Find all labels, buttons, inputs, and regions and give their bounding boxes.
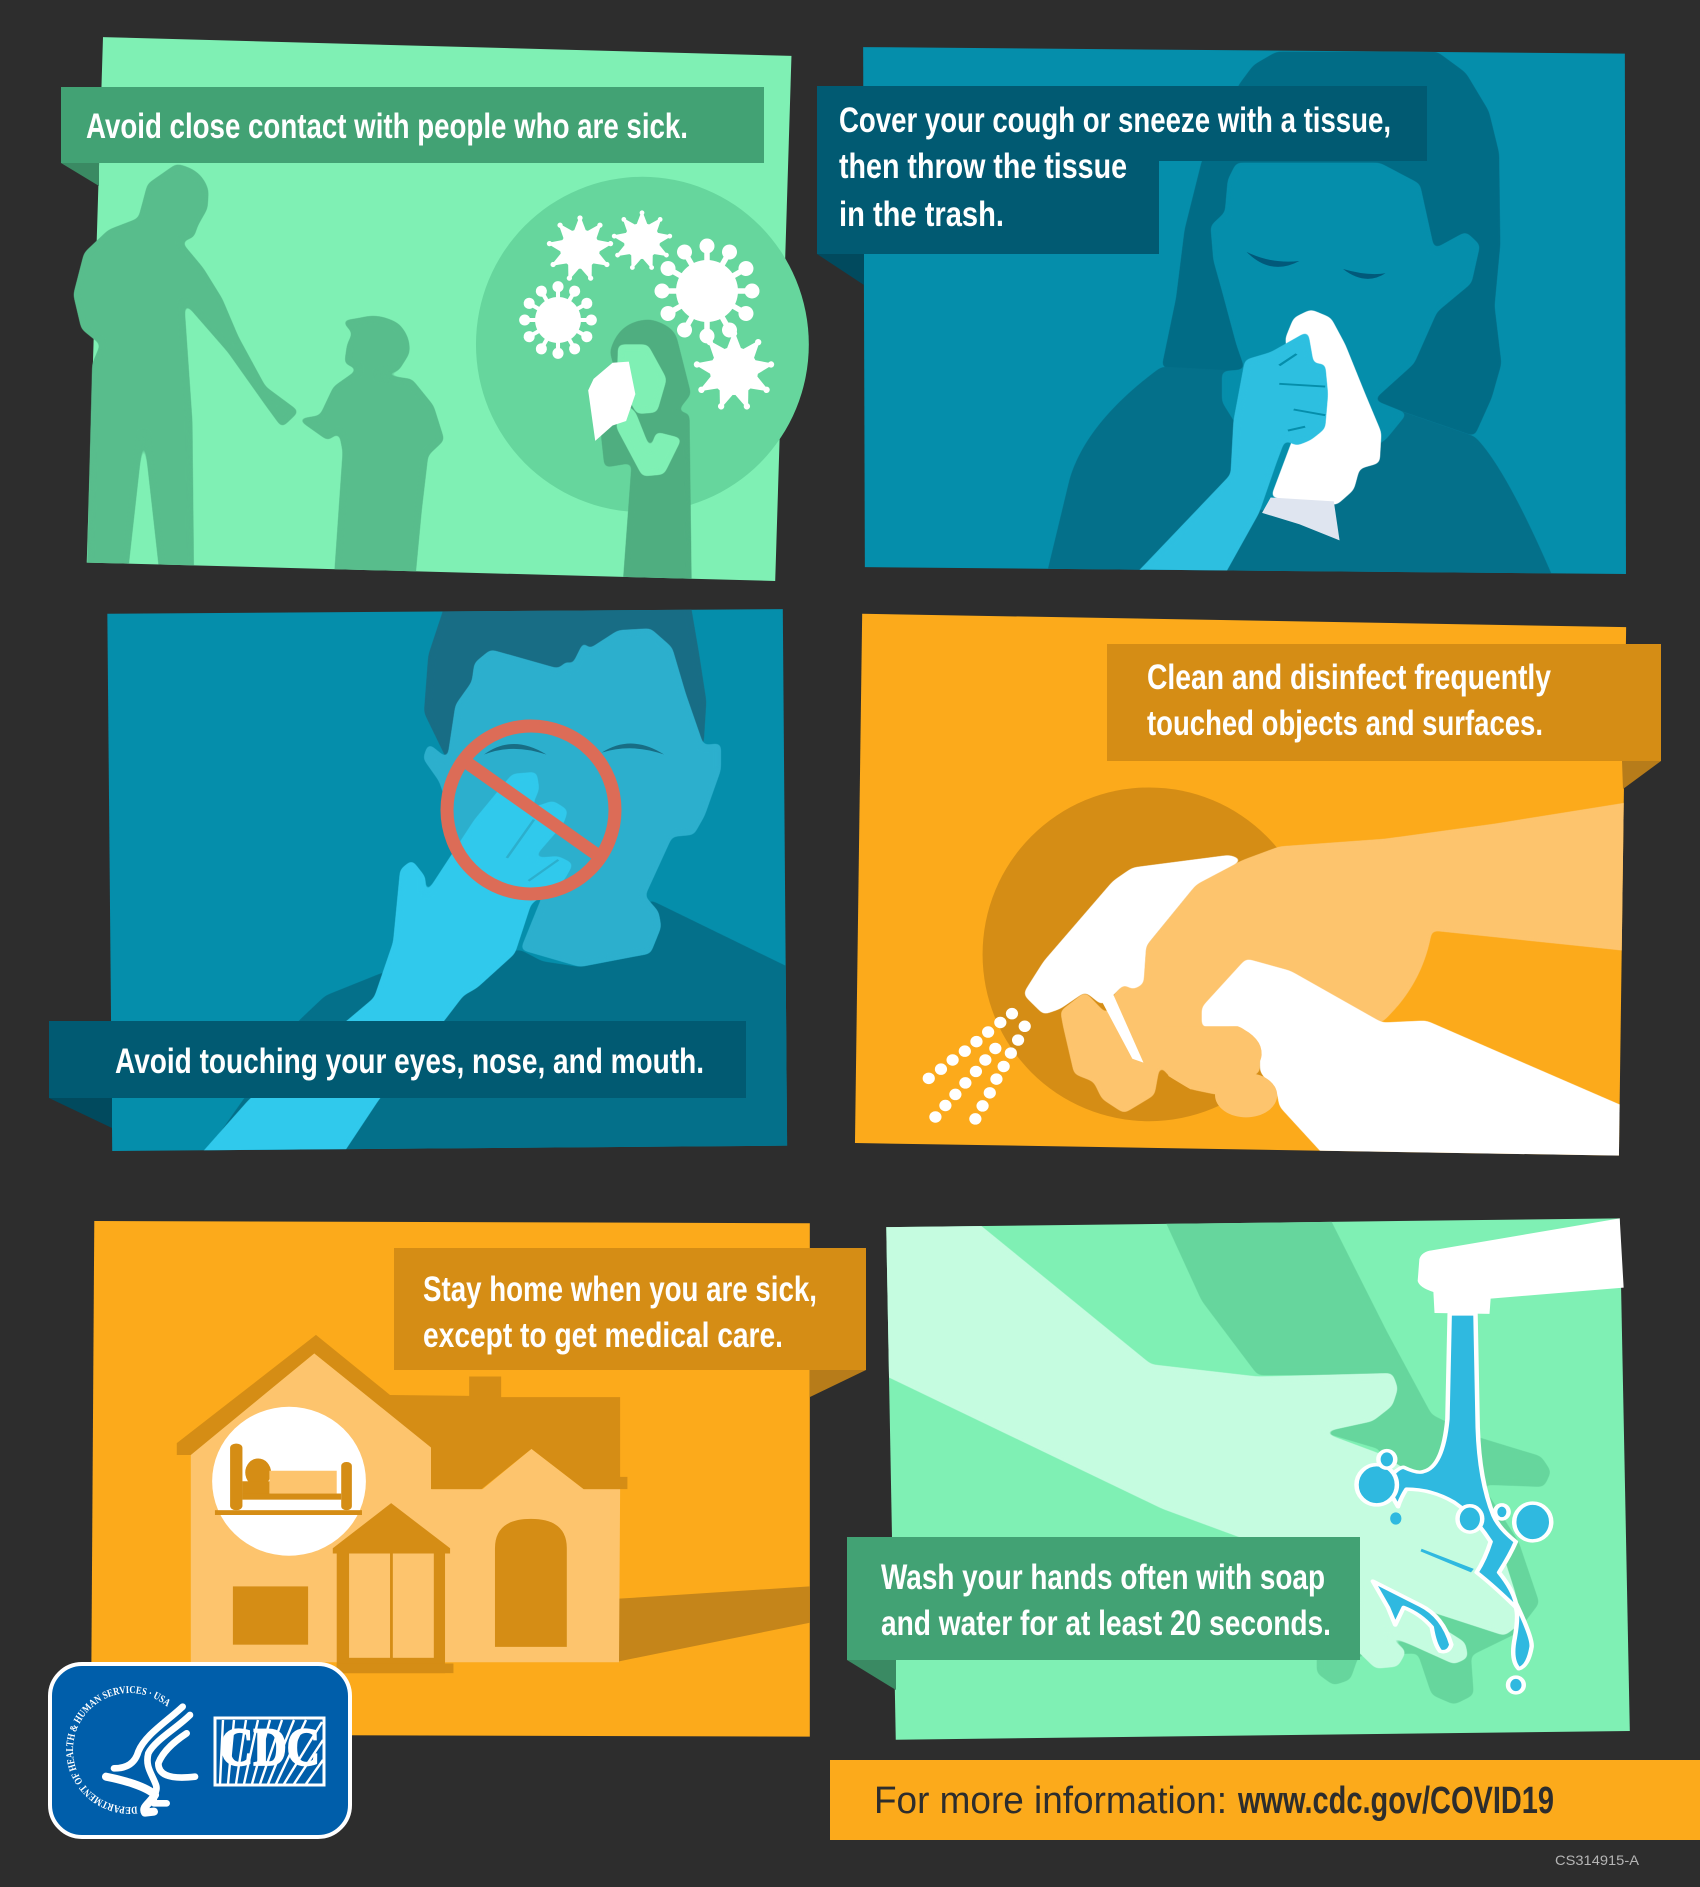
- icon: eyebrows: [484, 744, 664, 755]
- icon: faucet: [1418, 1218, 1624, 1314]
- figure: hand and arm: [195, 772, 574, 1160]
- banner: avoid close contact: [61, 87, 764, 186]
- icon: spray nozzle: [1024, 855, 1243, 1063]
- logo: HHS eagle: [106, 1707, 195, 1813]
- icon: closed eyes: [1247, 252, 1385, 279]
- banner: clean and disinfect: Clean and disinfect frequently: [1147, 658, 1551, 697]
- panel: wash your hands: [847, 1209, 1630, 1740]
- banner: wash your hands: Wash your hands often with soap: [881, 1558, 1325, 1597]
- panel: avoid close contact: [61, 37, 809, 589]
- icon: spray droplets: [923, 1008, 1031, 1125]
- figure: adult silhouette: [73, 164, 299, 578]
- footer: more information bar: For more information:: [874, 1780, 1227, 1822]
- figure: child silhouette: [297, 316, 445, 586]
- banner: stay home: Stay home when you are sick,: [423, 1270, 817, 1309]
- figure: hand holding tissue: [1130, 331, 1328, 580]
- panel: clean and disinfect: [855, 614, 1661, 1164]
- figure: house shadow: [619, 1586, 810, 1661]
- footer: more information bar: [830, 1760, 1700, 1840]
- publication code: CS314915-A: [1555, 1852, 1640, 1868]
- banner: cover your cough: then throw the tissue: [839, 147, 1127, 186]
- banner: wash your hands: and water for at least 20 seconds.: [881, 1604, 1331, 1643]
- figure: fingers over bottle: [1163, 1026, 1262, 1089]
- icon: prohibition sign: [447, 726, 615, 894]
- banner: avoid touching face: [49, 1021, 746, 1128]
- banner: clean and disinfect: [1107, 644, 1661, 789]
- figure: face and neck: [1210, 163, 1480, 513]
- icon: finger creases: [1279, 354, 1325, 431]
- figure: hand and arm: [1060, 799, 1651, 1114]
- banner: avoid close contact: Avoid close contact with people who are sick.: [86, 107, 688, 146]
- icon: house: [177, 1335, 627, 1673]
- figure: hair: [424, 610, 706, 755]
- figure: hair: [1162, 52, 1501, 436]
- footer: more information bar: www.cdc.gov/COVID19: [1237, 1780, 1554, 1822]
- banner: cover your cough: [817, 86, 1427, 285]
- panel: avoid touching face: [49, 598, 808, 1160]
- panel: cover your cough: [817, 47, 1626, 586]
- icon: tissue: [1262, 309, 1381, 540]
- figure: sick person sneezing: [588, 320, 692, 589]
- figure: back hand: [1160, 1209, 1551, 1705]
- figure: face: [423, 628, 721, 967]
- figure: shirt: [201, 897, 808, 1160]
- banner: stay home: [394, 1248, 866, 1397]
- panel: stay home: [91, 1221, 866, 1737]
- icon: virus particles: [519, 210, 776, 412]
- banner: clean and disinfect: touched objects and surfaces.: [1147, 704, 1543, 743]
- figure: front hand: [871, 1209, 1519, 1669]
- banner: stay home: except to get medical care.: [423, 1316, 783, 1355]
- icon: spray bottle: [1202, 960, 1620, 1156]
- logo: HHS seal text: DEPARTMENT OF HEALTH & HUMAN SERVICES · USA: [66, 1686, 170, 1814]
- banner: avoid touching face: Avoid touching your eyes, nose, and mouth.: [115, 1042, 704, 1081]
- logo: HHS and CDC: [48, 1662, 352, 1839]
- logo: CDC: CDC: [220, 1717, 320, 1777]
- banner: wash your hands: [847, 1537, 1360, 1690]
- figure: shoulders: [1044, 367, 1557, 586]
- icon: finger creases: [507, 820, 558, 881]
- banner: cover your cough: in the trash.: [839, 195, 1004, 234]
- icon: bed: [215, 1444, 362, 1515]
- icon: running water: [1357, 1314, 1551, 1693]
- banner: cover your cough: Cover your cough or sneeze with a tissue,: [839, 101, 1391, 140]
